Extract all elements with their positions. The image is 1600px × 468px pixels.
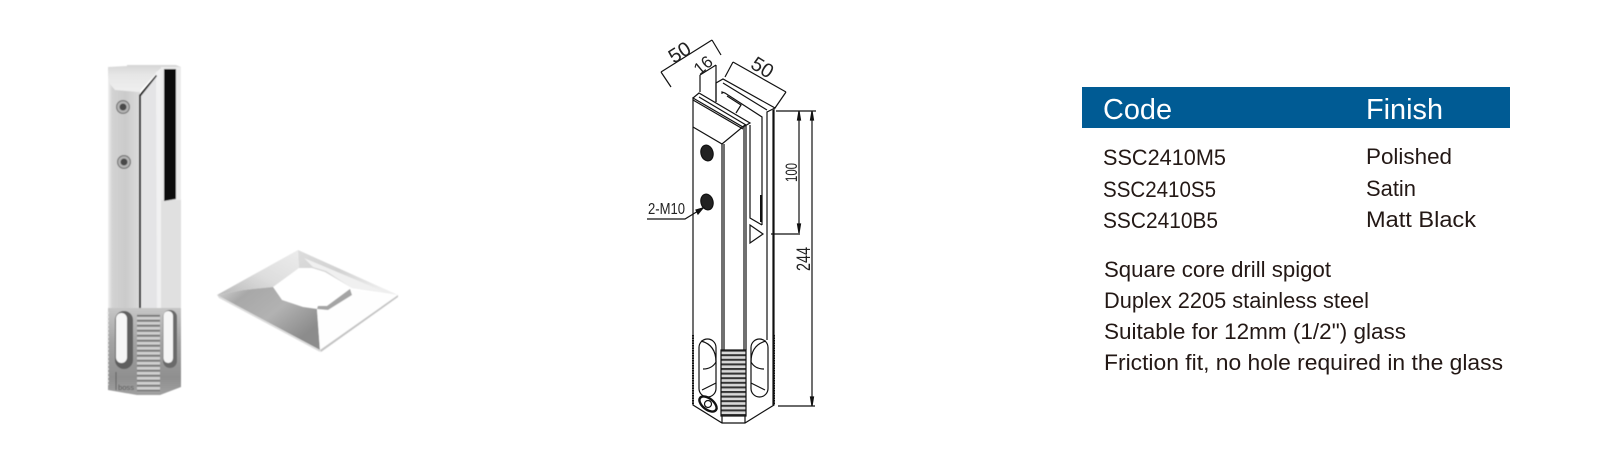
black shadow line bbox=[139, 75, 157, 312]
finishes: Matt Black bbox=[1366, 207, 1477, 232]
plate upper left facet bbox=[217, 250, 299, 295]
centre knurl bbox=[137, 314, 160, 392]
finishes: Satin bbox=[1366, 176, 1416, 201]
finishes: Polished bbox=[1366, 144, 1452, 169]
callout 2-M10: 2-M10 bbox=[648, 201, 685, 218]
header: Code: Code bbox=[1103, 94, 1172, 126]
maker mark: boss bbox=[118, 385, 135, 392]
glass slot lines bbox=[722, 92, 763, 243]
knurled base bbox=[108, 308, 181, 395]
feature list: Suitable for 12mm (1/2") glass bbox=[1104, 319, 1406, 344]
knurled centre bbox=[721, 350, 746, 423]
feature list bbox=[1104, 257, 1503, 375]
feature list: Friction fit, no hole required in the glass bbox=[1104, 350, 1503, 375]
dimension 244 bbox=[778, 111, 815, 406]
dimension 16 bbox=[690, 52, 717, 102]
serrated edges bbox=[693, 335, 774, 405]
product photo: cover plate bbox=[217, 250, 398, 352]
left oblong slot bbox=[699, 339, 716, 397]
top edges bbox=[693, 97, 746, 144]
body outline bbox=[693, 93, 774, 423]
maker mark bbox=[116, 372, 135, 392]
dimension 100 bbox=[771, 111, 816, 234]
right slot bbox=[163, 310, 177, 368]
technical drawing bbox=[647, 38, 816, 423]
plate upper right facet bbox=[298, 250, 398, 295]
product codes bbox=[1103, 145, 1226, 233]
product codes: SSC2410S5 bbox=[1103, 177, 1216, 202]
right oblong slot bbox=[751, 339, 768, 397]
dimension 50 left: 50 bbox=[665, 38, 695, 68]
dimension 50 left bbox=[661, 38, 721, 87]
logo stamp bbox=[697, 394, 719, 414]
plate lower edge bbox=[217, 295, 320, 352]
hole upper bbox=[699, 144, 715, 162]
feature list: Duplex 2205 stainless steel bbox=[1104, 288, 1369, 313]
spigot polished centre face bbox=[141, 70, 161, 314]
dimension 50 right bbox=[725, 53, 786, 108]
header: Finish: Finish bbox=[1366, 94, 1443, 126]
dimension 50 right: 50 bbox=[747, 53, 777, 83]
feature list: Square core drill spigot bbox=[1104, 257, 1331, 282]
hole lower bbox=[699, 193, 715, 211]
product photo: spigot bbox=[108, 65, 181, 395]
column lines bbox=[722, 125, 746, 350]
finishes bbox=[1366, 144, 1477, 232]
slot detail dark bbox=[760, 195, 762, 222]
plate hole rim bbox=[317, 289, 352, 310]
spigot right face bbox=[161, 67, 181, 313]
product codes: SSC2410B5 bbox=[1103, 208, 1218, 233]
plate lower right facet bbox=[317, 290, 398, 350]
spigot left face bbox=[108, 68, 140, 312]
left slot bbox=[115, 311, 133, 369]
product codes: SSC2410M5 bbox=[1103, 145, 1226, 170]
back plate bbox=[716, 79, 775, 405]
screw upper bbox=[116, 100, 130, 114]
table header bar bbox=[1082, 87, 1510, 128]
screw lower bbox=[117, 155, 131, 169]
plate lower left facet bbox=[217, 287, 320, 350]
glass slot bbox=[164, 69, 176, 201]
dimension 100: 100 bbox=[782, 163, 801, 182]
dimension 244: 244 bbox=[794, 247, 815, 271]
spigot top cap bbox=[108, 65, 181, 92]
dimension 16: 16 bbox=[690, 52, 717, 79]
serrated left edge bbox=[107, 312, 109, 385]
